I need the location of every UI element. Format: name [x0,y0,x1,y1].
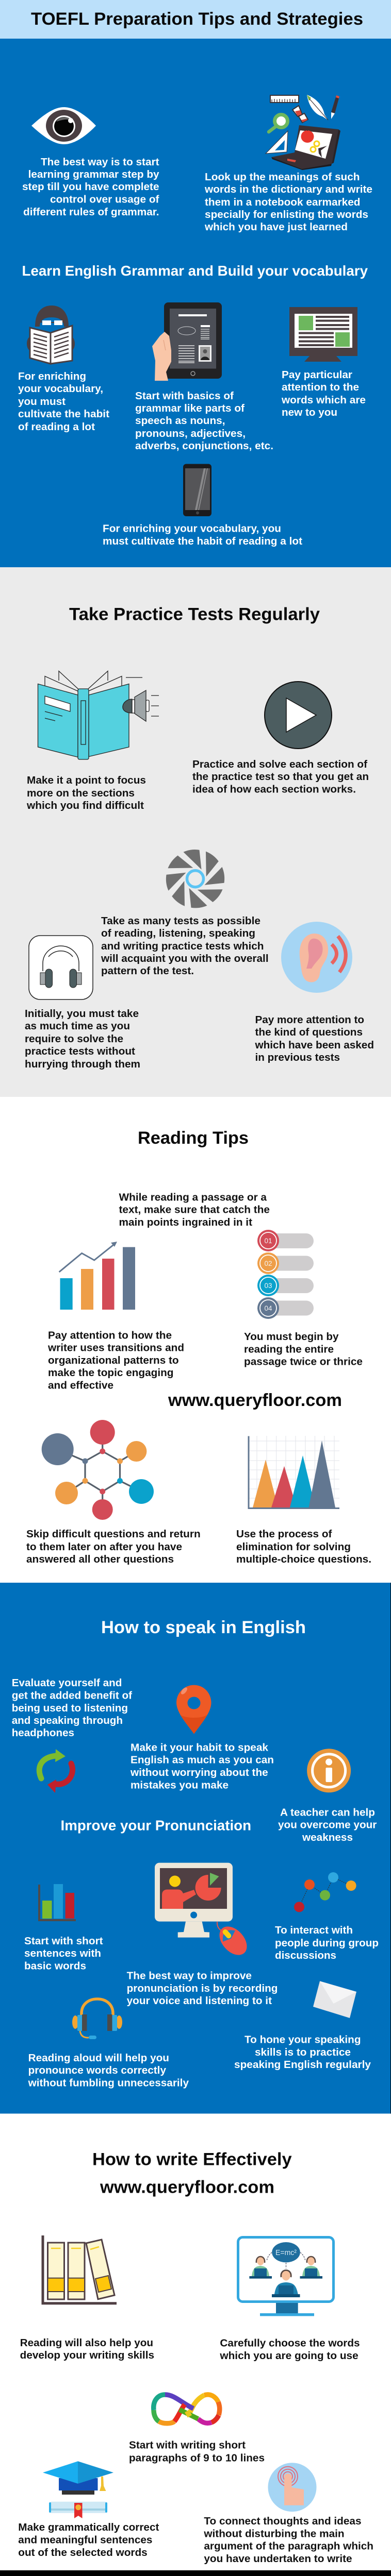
text: short paragraphs: paragraphs of 9 to 10 lines [129,2452,265,2464]
text: transitions and patterns [47,1330,184,1391]
text: connect thoughts: you have undertaken to write [204,2553,352,2565]
text: grammar step by step: The best way is to start [41,156,159,168]
heading: take practice tests: Take Practice Tests Regularly [69,605,320,624]
chart: rising bars [59,1242,135,1310]
text: skip difficult questions: to them later on after you have [26,1541,182,1553]
text: reading habit: you must [18,396,66,408]
icon: books on shelf [43,2235,117,2303]
text: take many tests: of reading, listening, speaking [101,927,255,939]
text: focus on difficult sections: Make it a point to focus [27,774,146,786]
text: record your voice: your voice and listening to it [127,1995,272,2007]
text: new words: new to you [282,406,337,418]
text: short sentences [24,1935,103,1972]
text: evaluate yourself: Evaluate yourself and [12,1677,122,1689]
text: kinds of questions: Pay more attention to [255,1014,364,1026]
text: process of elimination [236,1528,371,1565]
text: kinds of questions: which have been asked [254,1039,374,1051]
panel: how to speak [0,1583,390,2113]
text: dictionary notebook: them in a notebook earmarked [205,196,360,208]
text: process of elimination: multiple-choice questions. [236,1553,371,1565]
text: reading develops writing: Reading will also help you [20,2337,153,2349]
panel: reading tips [0,1097,391,1583]
text: group discussions: people during group [275,1937,379,1949]
text: speak as much as you can [130,1741,274,1791]
text: choose words carefully: Carefully choose the words [220,2337,360,2349]
text: read passage twice: passage twice or thrice [244,1356,363,1368]
text: skip difficult questions: answered all other questions [26,1553,174,1565]
text: basics of grammar [135,390,273,452]
text: take your time: hurrying through them [25,1058,140,1070]
icon: map pin [176,1685,211,1734]
text: choose words carefully: which you are going to use [219,2350,359,2362]
heading: reading tips: Reading Tips [138,1128,249,1148]
text: connect thoughts: argument of the paragraph which [204,2540,373,2552]
text: teacher can help: A teacher can help [280,1806,375,1819]
text: group discussions: To interact with [275,1924,353,1936]
icon: desktop monitor [289,307,357,362]
text: cultivate reading habit: For enriching your vocabulary, you [103,523,281,535]
text: process of elimination: Use the process of [236,1528,332,1540]
text: reading habit [18,370,109,433]
text: cultivate reading habit [103,523,302,547]
text: correct sentences: out of the selected words [18,2547,148,2558]
text: read passage twice: You must begin by [244,1331,339,1343]
text: main points: text, make sure that catch the [119,1204,270,1216]
text: grammar step by step [22,156,159,218]
heading: how to speak: How to speak in English [101,1618,306,1637]
text: take many tests: will acquaint you with the overall [101,953,269,964]
icon: presenter on monitor with mouse [155,1863,252,1960]
text: teacher can help: weakness [302,1832,353,1843]
heading: learn english grammar: Learn English Grammar and Build your vocabulary [22,263,368,279]
text: connect thoughts: without disturbing the main [203,2528,345,2539]
text: reading develops writing: develop your writing skills [20,2349,154,2361]
text: kinds of questions [254,1014,374,1063]
text: grammar step by step: step till you have complete [22,181,159,193]
text: kinds of questions: in previous tests [255,1052,340,1063]
text: cultivate reading habit: must cultivate the habit of reading a lot [103,535,302,547]
icon: play button [265,682,332,749]
panel: how to write [0,2113,391,2570]
text: practice speaking: skills is to practice [255,2046,351,2058]
text: reading aloud: without fumbling unnecessarily [28,2077,189,2089]
text: dictionary notebook: words in the dictionary and write [204,183,372,195]
text: record your voice: pronunciation is by recording [127,1982,278,1994]
text: transitions and patterns: Pay attention to how the [48,1330,172,1342]
icon: molecule network [42,1420,154,1520]
text: evaluate yourself [12,1677,132,1739]
text: short sentences: Start with short [24,1935,103,1947]
heading: improve pronunciation: Improve your Pronunciation [61,1818,251,1834]
icon: open book with speaker [38,671,159,759]
icon: graduation cap and diploma [43,2461,113,2518]
text: grammar step by step: different rules of grammar. [23,206,159,218]
text: practice speaking: To hone your speaking [245,2034,361,2046]
text: reading habit: cultivate the habit [18,408,109,420]
heading: how to write: How to write Effectively [92,2149,292,2169]
text: new words: attention to the [282,381,359,393]
text: take your time [25,1008,140,1070]
text: take many tests: and writing practice tests which [101,940,264,952]
text: transitions and patterns: organizational patterns to [48,1354,179,1366]
icon: person reading newspaper [27,306,75,364]
icon: hand holding tablet [152,302,222,381]
text: take your time: as much time as you [25,1020,130,1032]
icon: numbered list 01-04 [257,1230,314,1319]
text: skip difficult questions: Skip difficult questions and return [26,1528,201,1540]
text: main points: While reading a passage or a [119,1191,267,1204]
icon: headset [72,1999,122,2039]
text: solve each section: Practice and solve each section of [192,758,367,770]
text: new words: Pay particular [282,369,352,381]
text: group discussions: discussions [275,1950,336,1961]
text: reading aloud [28,2052,189,2089]
text: connect thoughts [203,2515,373,2565]
text: process of elimination: elimination for solving [236,1541,351,1553]
text: solve each section: idea of how each section works. [192,784,356,795]
icon: info badge [307,1749,351,1792]
icon: envelope [313,1981,356,2018]
text: dictionary notebook: specially for enlisting the words [205,209,368,221]
text: new words: words which are [281,394,366,406]
text: take your time: require to solve the [25,1033,123,1045]
text: practice speaking [234,2034,371,2071]
text: take your time: practice tests without [25,1045,135,1057]
icon: green and red cycle arrows [39,1749,72,1793]
text: basics of grammar: grammar like parts of [135,402,245,414]
text: correct sentences: and meaningful sentences [18,2534,152,2546]
text: choose words carefully [219,2337,360,2362]
text: read passage twice [244,1331,363,1368]
icon: numbered list 01-04: 02 [264,1260,272,1267]
text: main points: main points ingrained in it [119,1216,252,1228]
text: speak as much as you can: without worrying about the [130,1767,268,1778]
text: teacher can help: you overcome your [278,1819,377,1831]
text: speak as much as you can: Make it your habit to speak [131,1741,268,1754]
text: basics of grammar: Start with basics of [135,390,234,402]
website url: www.queryfloor.com [100,2178,274,2197]
icon: numbered list 01-04: 01 [264,1237,272,1245]
text: new words [281,369,366,418]
text: dictionary notebook: which you have just learned [204,221,348,233]
icon: headphones card [29,936,93,999]
text: solve each section: the practice test so that you get an [192,771,369,783]
panel: grammar and vocabulary [0,39,391,567]
text: reading habit: For enriching [18,370,86,382]
text: correct sentences [18,2521,159,2558]
text: focus on difficult sections [26,774,146,811]
text: record your voice [127,1970,278,2007]
text: reading habit: your vocabulary, [18,383,103,395]
text: dictionary notebook [204,171,372,233]
text: grammar step by step: learning grammar step by [28,168,159,180]
icon: finger touch [268,2463,317,2512]
text: transitions and patterns: and effective [48,1379,113,1391]
text: evaluate yourself: and speaking through [12,1715,123,1726]
icon: online classroom monitor [238,2237,333,2316]
text: practice speaking: speaking English regularly [234,2059,371,2071]
icon: rainbow infinity [154,2395,220,2424]
icon: connected coloured dots [294,1872,356,1912]
icon: smartphone [183,464,211,516]
text: short paragraphs: Start with writing short [129,2439,246,2451]
text: connect thoughts: To connect thoughts and ideas [204,2515,361,2527]
text: reading habit: of reading a lot [18,421,95,433]
website url: www.queryfloor.com [168,1391,342,1410]
text: evaluate yourself: headphones [12,1727,74,1739]
icon: laptop with school items [266,95,340,170]
text: dictionary notebook: Look up the meanings of such [205,171,360,183]
text: main points [119,1191,270,1228]
icon: small bar chart [39,1884,76,1920]
text: record your voice: The best way to improve [127,1970,252,1981]
text: take many tests: pattern of the test. [101,965,194,977]
text: short sentences: basic words [24,1960,86,1972]
icon: eye [31,107,96,144]
icon: numbered list 01-04: 03 [264,1282,272,1290]
text: focus on difficult sections: more on the sections [27,787,135,799]
text: transitions and patterns: make the topic engaging [48,1367,173,1379]
text: short paragraphs [129,2439,265,2464]
title: TOEFL Preparation Tips and Strategies [31,9,363,29]
icon: online classroom monitor: E=mc² [275,2248,297,2257]
text: take many tests: Take as many tests as possible [101,915,260,927]
text: speak as much as you can: mistakes you make [131,1780,229,1791]
text: grammar step by step: control over usage of [50,194,159,205]
text: reading aloud: Reading aloud will help you [28,2052,169,2064]
icon: ear with sound waves [281,922,352,993]
text: basics of grammar: adverbs, conjunctions, etc. [135,440,273,452]
text: reading aloud: pronounce words correctly [28,2064,166,2076]
text: speak as much as you can: English as much as you can [131,1754,274,1766]
text: read passage twice: reading the entire [244,1344,334,1355]
text: evaluate yourself: being used to listening [12,1702,128,1714]
chart: mountain peaks [249,1436,339,1509]
text: basics of grammar: speech as nouns, [135,415,225,427]
title banner [0,0,391,39]
icon: camera shutter [166,850,224,908]
text: short sentences: sentences with [24,1947,101,1959]
text: kinds of questions: the kind of questions [255,1026,363,1038]
text: reading develops writing [20,2337,154,2361]
text: teacher can help [278,1806,377,1843]
text: focus on difficult sections: which you find difficult [26,800,144,811]
text: take your time: Initially, you must take [25,1008,139,1020]
text: solve each section [192,758,369,795]
text: group discussions [275,1924,379,1961]
text: transitions and patterns: writer uses transitions and [47,1342,184,1354]
panel: practice tests [0,567,391,1097]
text: evaluate yourself: get the added benefit of [12,1690,132,1701]
text: correct sentences: Make grammatically correct [18,2521,159,2533]
text: basics of grammar: pronouns, adjectives, [135,428,246,439]
text: take many tests [101,915,269,977]
icon: numbered list 01-04: 04 [264,1304,272,1312]
footer banner [0,2570,391,2576]
text: skip difficult questions [26,1528,201,1565]
